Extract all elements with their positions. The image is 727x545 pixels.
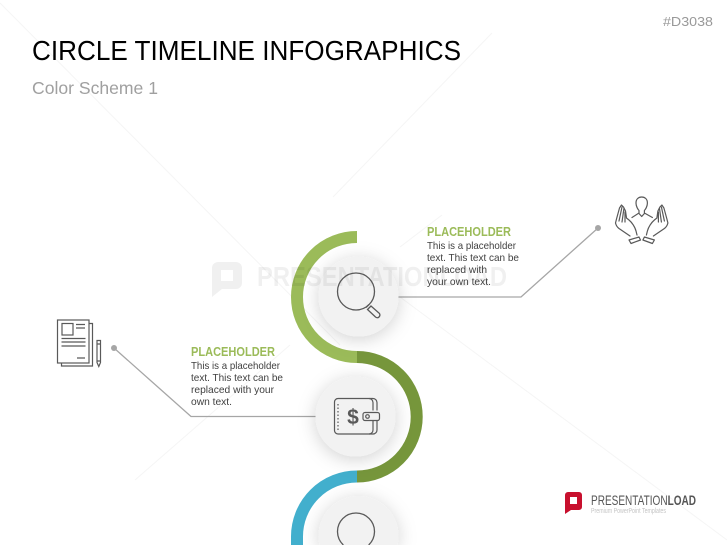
body text: own text. [191,396,232,408]
node circle: wallet background [316,376,396,456]
subtitle: Color Scheme 1 [32,78,158,98]
icon: document and pencil [58,320,100,366]
icon: wallet [334,398,380,434]
timeline arc: dark green [357,357,417,476]
text block: right callout [427,225,519,288]
product code: #D3038 [663,15,713,29]
body text: This is a placeholder [191,360,280,372]
node circle: search background (cropped) [318,496,398,545]
timeline arc: light green [297,237,357,357]
body text [191,360,283,408]
logo: PresentationLoad [565,492,696,515]
watermark: PRESENTATIONLOAD [257,261,507,292]
body text: replaced with [427,264,487,276]
logo tagline: Premium PowerPoint Templates [591,508,666,515]
heading: PLACEHOLDER [427,225,511,239]
body text: replaced with your [191,384,274,396]
title: CIRCLE TIMELINE INFOGRAPHICS [32,35,461,66]
connector: right callout [398,225,601,297]
icon: magnifier (cropped) [338,513,375,545]
icon: dollar sign: $ [347,406,359,429]
pencil [97,340,100,366]
watermark [212,261,507,297]
body text: text. This text can be [191,372,283,384]
timeline arc: blue [297,476,357,545]
body text [427,240,519,288]
text block: left callout [191,345,283,408]
logo mark [565,492,582,514]
logo wordmark: PRESENTATIONLOAD [591,492,696,508]
body text: This is a placeholder [427,240,516,252]
heading: PLACEHOLDER [191,345,275,359]
body text: text. This text can be [427,252,519,264]
icon: magnifier [338,273,380,318]
connector: left callout [111,345,316,416]
body text: your own text. [427,276,491,288]
node circle: search background [318,256,398,336]
icon: caring hands with person [616,197,668,244]
